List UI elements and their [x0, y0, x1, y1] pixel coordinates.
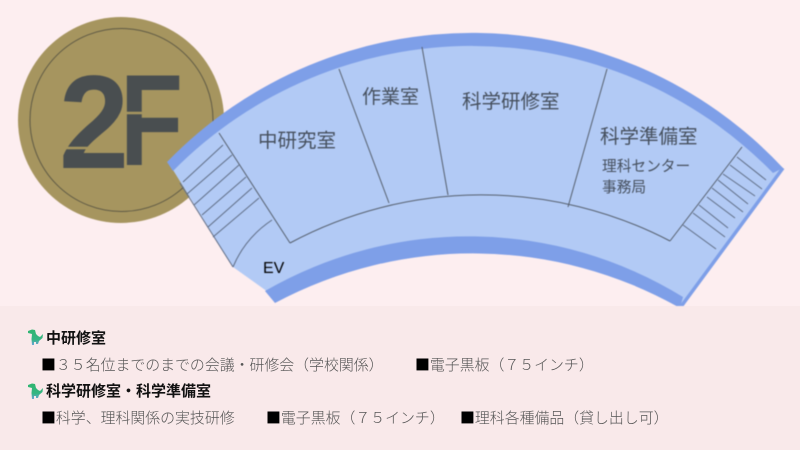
label: 科学準備室: 科学準備室	[600, 126, 698, 148]
floor map	[17, 16, 785, 307]
text: room usage 2: ■科学、理科関係の実技研修	[41, 407, 235, 428]
text: room usage 1: ■３５名位までのまでの会議・研修会（学校関係）	[41, 354, 384, 375]
label: 科学研修室: 科学研修室	[462, 91, 560, 113]
label: 事務局: 事務局	[602, 179, 646, 196]
icon: dinosaur 2	[28, 384, 43, 399]
right edge	[680, 168, 783, 308]
text: equipment 1: ■電子黒板（７５インチ）	[415, 354, 594, 375]
badge: 2F	[18, 17, 224, 223]
outer wall band	[167, 33, 783, 173]
text: equipment 3: ■理科各種備品（貸し出し可）	[460, 407, 668, 428]
label: 中研究室: 中研究室	[258, 130, 336, 152]
text: equipment 2: ■電子黒板（７５インチ）	[266, 407, 445, 428]
icon: dinosaur 1	[28, 330, 43, 345]
badge: 2F: 2	[59, 49, 129, 197]
right staircase	[683, 157, 766, 249]
label: EV: EV	[263, 260, 285, 277]
left staircase	[180, 145, 272, 267]
inner wall band	[265, 236, 683, 308]
heading: 中研修室: 中研修室	[46, 330, 106, 347]
floor plan shape	[173, 40, 781, 306]
room walls	[219, 47, 742, 243]
heading: 科学研修室・科学準備室: 科学研修室・科学準備室	[46, 383, 211, 400]
label: 理科センター: 理科センター	[602, 158, 690, 175]
badge: 2F: F	[120, 47, 183, 193]
label: 作業室: 作業室	[362, 86, 419, 108]
